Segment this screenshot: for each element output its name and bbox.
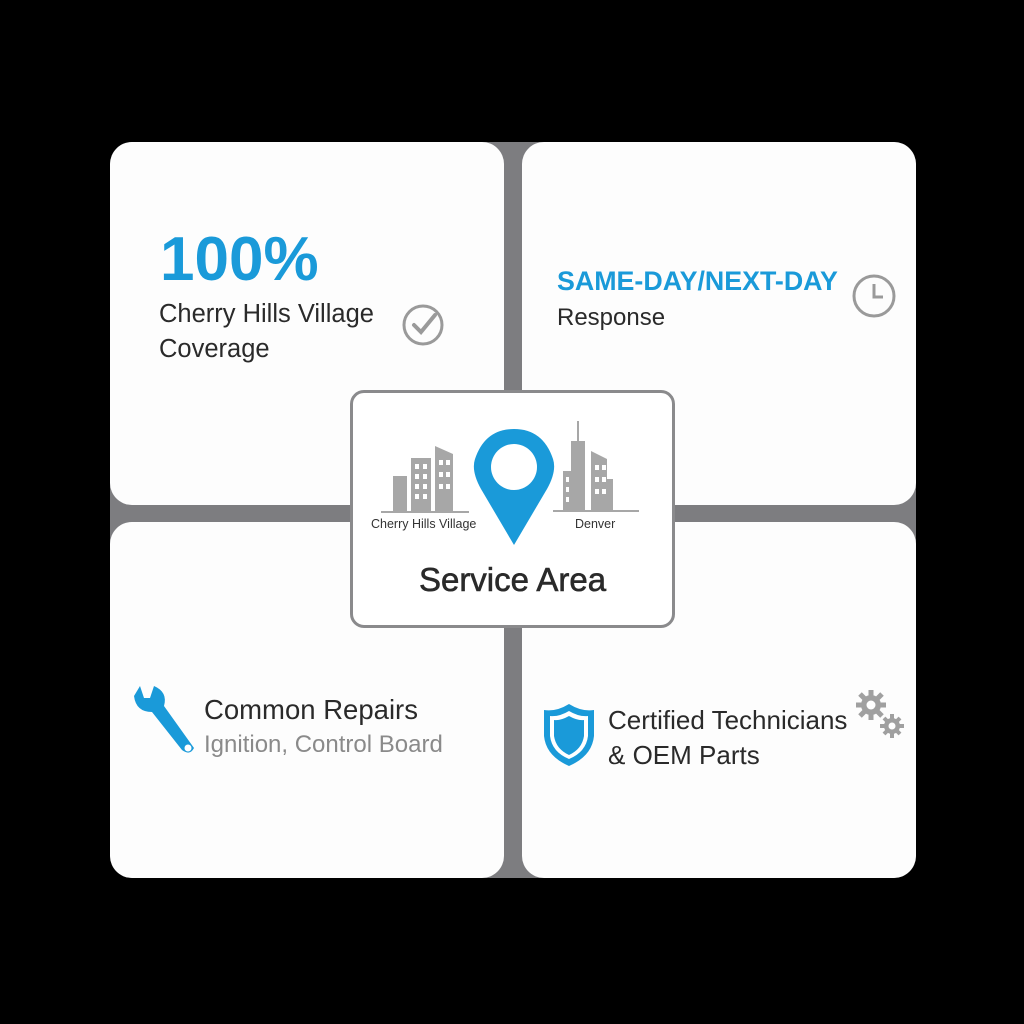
text: coverage label: Coverage	[159, 335, 270, 363]
stat: 100%: 100%	[160, 225, 319, 294]
icon: shield	[544, 704, 594, 766]
panel: response	[522, 142, 916, 505]
center box: service area	[350, 390, 675, 628]
text: response: Response	[557, 304, 665, 331]
label: cherry hills village: Cherry Hills Village	[371, 517, 476, 531]
panel: certified	[522, 522, 916, 878]
gray frame background	[110, 142, 916, 878]
icon: check circle	[402, 304, 444, 346]
heading: common repairs: Common Repairs	[204, 694, 418, 725]
text: repair types: Ignition, Control Board	[204, 731, 443, 758]
text: certified technicians: & OEM Parts	[608, 740, 760, 770]
icon: clock	[852, 274, 896, 318]
panel: coverage	[110, 142, 504, 505]
icon: location pin	[474, 429, 554, 545]
heading: same-day: SAME-DAY/NEXT-DAY	[557, 266, 838, 296]
icon: buildings left	[381, 446, 469, 513]
text: coverage label: Cherry Hills Village	[159, 300, 374, 328]
icon: buildings right	[553, 421, 639, 512]
heading: service area: Service Area	[419, 561, 606, 598]
icon: wrench	[134, 686, 194, 753]
panel: repairs	[110, 522, 504, 878]
text: coverage label	[159, 300, 374, 363]
text: certified technicians: Certified Technicians	[608, 705, 847, 735]
label: denver: Denver	[575, 517, 615, 531]
icon: gears	[856, 690, 904, 738]
text: certified technicians	[608, 705, 847, 770]
